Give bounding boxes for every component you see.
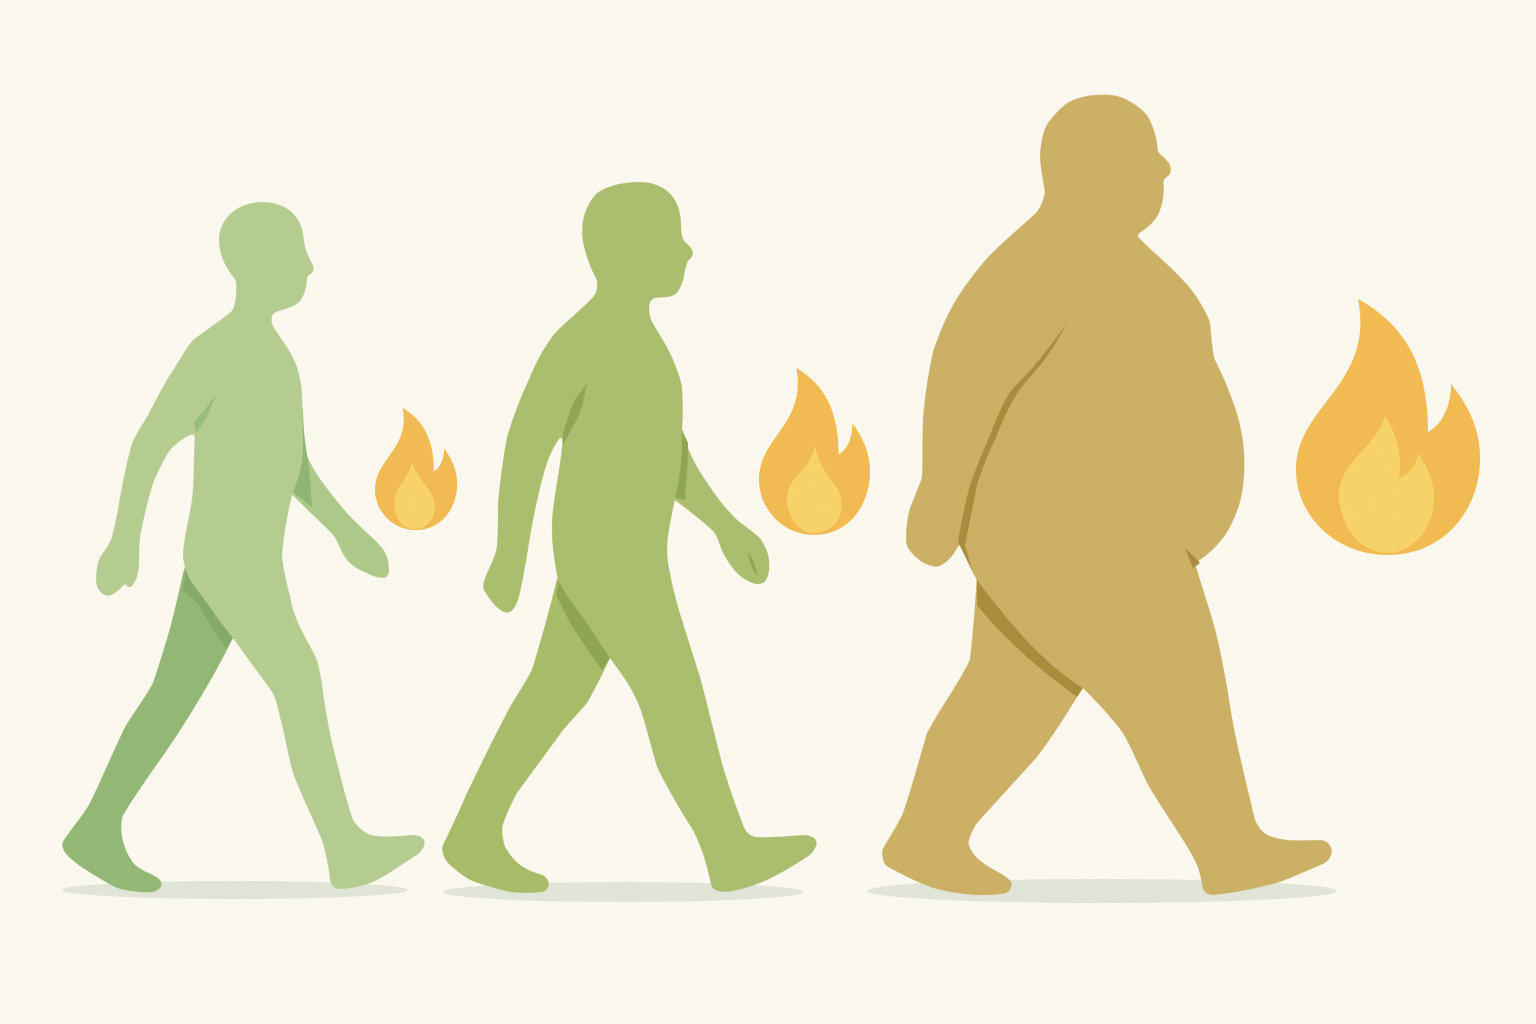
back leg	[62, 565, 240, 892]
inner flame	[394, 462, 435, 529]
flame: large	[1296, 299, 1480, 555]
torso, head, belly, arm and front leg	[906, 95, 1332, 895]
arm crease shadow	[958, 323, 1067, 570]
back leg	[442, 575, 620, 893]
torso, head, front leg and rear arm	[96, 202, 425, 889]
hip shadow	[183, 568, 233, 648]
torso, head, front leg and rear arm	[483, 182, 817, 892]
back leg	[882, 570, 1083, 895]
outer flame	[1296, 299, 1480, 555]
inner flame	[787, 445, 842, 533]
ground shadow: small figure	[62, 881, 408, 899]
belly shadow	[1185, 548, 1200, 568]
ground shadow: large figure	[867, 879, 1337, 903]
hand crease	[748, 552, 757, 575]
arm shadow	[293, 407, 312, 507]
figure: large ochre walker	[882, 95, 1332, 895]
outer flame	[759, 368, 870, 535]
flame: small	[375, 408, 457, 530]
inner flame	[1339, 416, 1434, 553]
front arm	[672, 430, 769, 584]
crotch shadow	[977, 578, 1083, 697]
figure: medium olive green walker	[442, 182, 817, 893]
arm shadow	[675, 430, 688, 500]
flame: medium	[759, 368, 870, 535]
outer flame	[375, 408, 457, 530]
front arm	[288, 440, 389, 578]
armpit shadow	[194, 393, 217, 433]
figure: slim light green walker	[62, 202, 425, 892]
armpit shadow	[563, 383, 587, 445]
hip shadow	[556, 578, 610, 670]
ground shadow: medium figure	[443, 882, 803, 902]
